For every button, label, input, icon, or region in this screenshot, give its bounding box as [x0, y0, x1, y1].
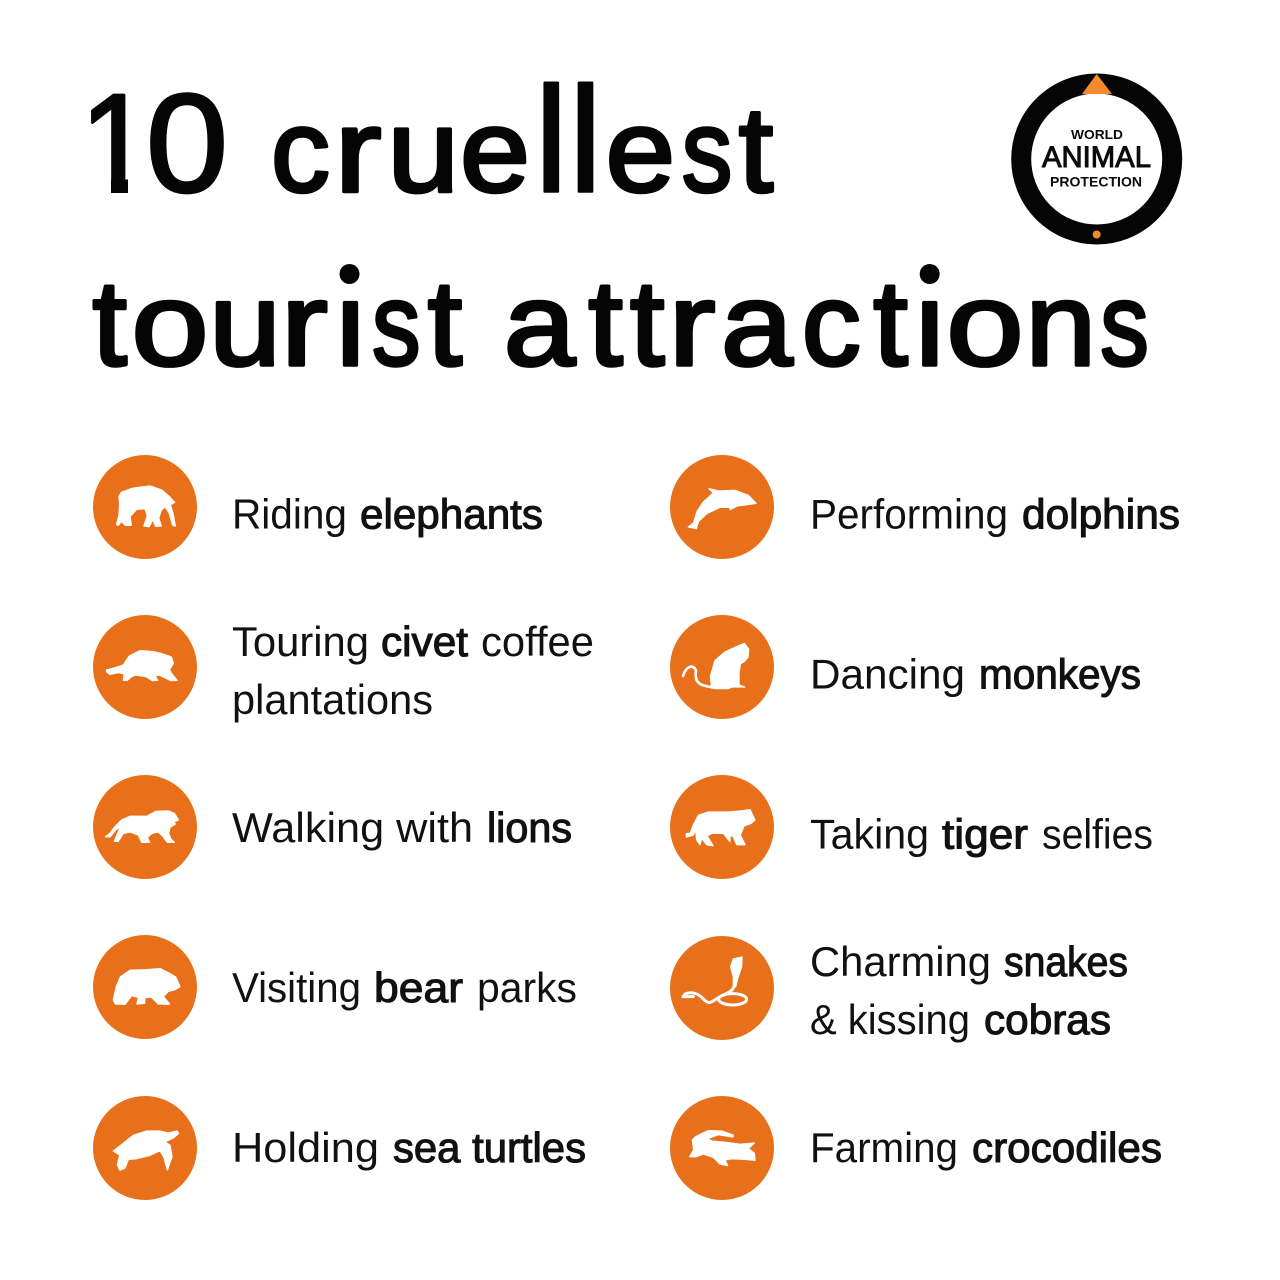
title: 1 — [80, 64, 152, 222]
item: performing dolphins — [670, 455, 1180, 559]
icon: lion — [93, 775, 197, 879]
title: t — [588, 255, 623, 391]
title: s — [372, 259, 420, 391]
label: touring civet coffee plantations: Touring — [232, 618, 369, 665]
icon: dolphin — [670, 455, 774, 559]
icon: tiger — [670, 775, 774, 879]
label: visiting bear parks: Visiting — [232, 964, 361, 1011]
title: i — [915, 259, 944, 391]
label: visiting bear parks: bear — [374, 964, 463, 1011]
icon: crocodile — [670, 1096, 774, 1200]
label: riding elephants — [232, 490, 543, 538]
label: visiting bear parks — [232, 964, 577, 1011]
title: l — [569, 56, 602, 224]
label: holding sea turtles: Holding — [232, 1124, 379, 1171]
label: charming snakes and kissing cobras: cobras — [984, 996, 1111, 1043]
title: t — [428, 255, 462, 391]
icon: monkey — [670, 615, 774, 719]
icon: cobra — [670, 936, 774, 1040]
label: charming snakes and kissing cobras: snakes — [1004, 938, 1128, 985]
icon: civet — [93, 615, 197, 719]
label: touring civet coffee plantations — [232, 618, 594, 723]
icon: elephant — [93, 455, 197, 559]
label: taking tiger selfies — [810, 810, 1153, 858]
title: i — [336, 259, 365, 391]
logo: World Animal Protection — [1021, 74, 1172, 238]
label: holding sea turtles: sea turtles — [393, 1124, 586, 1171]
title: t — [873, 255, 908, 391]
title: r — [334, 86, 382, 218]
label: taking tiger selfies: tiger — [942, 810, 1028, 858]
label: charming snakes and kissing cobras: & kissing — [810, 996, 970, 1043]
label: walking with lions — [232, 804, 572, 851]
title: o — [132, 259, 208, 391]
label: touring civet coffee plantations: coffee — [481, 618, 594, 665]
title: s — [1100, 259, 1149, 391]
logo: World Animal Protection: ANIMAL — [1042, 141, 1151, 174]
label: touring civet coffee plantations: civet — [381, 618, 468, 665]
icon: sea turtle — [93, 1096, 197, 1200]
title: r — [668, 259, 716, 391]
label: performing dolphins: Performing — [810, 490, 1008, 538]
item: charming snakes and kissing cobras — [670, 936, 1128, 1043]
item: taking tiger selfies — [670, 775, 1153, 879]
label: charming snakes and kissing cobras: Charming — [810, 938, 991, 985]
item: riding elephants — [93, 455, 543, 559]
label: dancing monkeys: Dancing — [810, 650, 965, 698]
item: dancing monkeys — [670, 615, 1141, 719]
label: performing dolphins — [810, 490, 1180, 538]
title: c — [271, 86, 330, 218]
title: e — [460, 86, 530, 218]
logo: World Animal Protection: WORLD — [1071, 127, 1123, 142]
label: riding elephants: Riding — [232, 490, 347, 538]
title: 0 — [146, 64, 228, 222]
title: u — [388, 86, 459, 218]
logo: World Animal Protection: PROTECTION — [1050, 174, 1142, 190]
title: t — [739, 82, 773, 218]
item: touring civet coffee plantations — [93, 615, 594, 723]
label: walking with lions: Walking with — [232, 804, 473, 851]
item: walking with lions — [93, 775, 572, 879]
label: farming crocodiles: Farming — [810, 1124, 958, 1171]
label: taking tiger selfies: Taking — [810, 810, 929, 858]
title — [91, 82, 1147, 368]
title: n — [1026, 259, 1096, 391]
label: dancing monkeys — [810, 650, 1141, 698]
item: visiting bear parks — [93, 935, 577, 1039]
title: c — [802, 259, 861, 391]
item: farming crocodiles — [670, 1096, 1162, 1200]
label: walking with lions: lions — [487, 804, 572, 851]
icon: bear — [93, 935, 197, 1039]
title: u — [209, 259, 281, 391]
item: holding sea turtles — [93, 1096, 586, 1200]
label: performing dolphins: dolphins — [1022, 490, 1180, 538]
title: t — [630, 255, 665, 391]
title: t — [92, 255, 127, 391]
label: farming crocodiles — [810, 1124, 1162, 1171]
label: visiting bear parks: parks — [477, 964, 577, 1011]
label: charming snakes and kissing cobras — [810, 938, 1128, 1043]
title: a — [504, 259, 576, 391]
label: holding sea turtles — [232, 1124, 586, 1171]
label: dancing monkeys: monkeys — [979, 650, 1141, 698]
title: o — [946, 259, 1024, 391]
title: a — [721, 259, 793, 391]
label: taking tiger selfies: selfies — [1042, 810, 1153, 858]
title: r — [281, 259, 328, 391]
title: l — [535, 56, 568, 224]
label: riding elephants: elephants — [360, 490, 543, 538]
label: touring civet coffee plantations: plantations — [232, 676, 433, 723]
title: e — [606, 86, 675, 218]
title: s — [682, 86, 732, 218]
label: farming crocodiles: crocodiles — [972, 1124, 1162, 1171]
